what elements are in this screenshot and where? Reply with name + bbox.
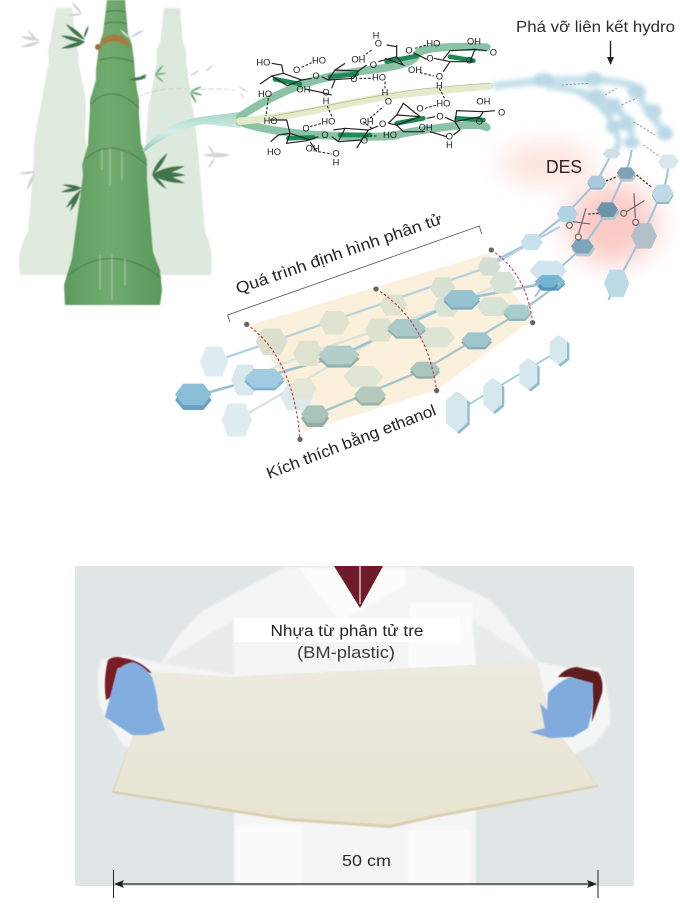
arrow: pointing to fibre bbox=[607, 41, 614, 65]
DES solvent glow bbox=[499, 144, 658, 264]
atom labels: HO bbox=[258, 89, 272, 99]
right glove bbox=[530, 677, 593, 738]
blurred blue fibre bbox=[493, 73, 674, 150]
atom labels: HO bbox=[436, 98, 450, 108]
label: BM-plastic: (BM-plastic) bbox=[297, 643, 395, 662]
left background bamboo bbox=[19, 8, 87, 275]
right cuff bbox=[558, 667, 602, 722]
atom labels: OH bbox=[306, 143, 320, 153]
atom labels: O bbox=[416, 103, 424, 113]
thick rings bbox=[175, 277, 558, 427]
photo: researcher holding BM-plastic sheet bbox=[75, 566, 634, 886]
strands bbox=[487, 150, 668, 300]
hydrogen bonds bbox=[266, 45, 445, 154]
atom labels: H bbox=[446, 140, 453, 150]
molecular structure: cellulose chains with hydrogen bonds bbox=[240, 30, 505, 167]
label box: plastic from bamboo molecules bbox=[234, 618, 460, 642]
lab coat bbox=[98, 567, 610, 884]
atom labels bbox=[256, 30, 505, 167]
atom labels: O bbox=[312, 71, 320, 81]
scissors bbox=[566, 193, 644, 240]
label: ethanol stimulation: Kích thích bằng ethanol bbox=[264, 400, 438, 483]
shaping zone band bbox=[250, 253, 532, 432]
atom labels: O bbox=[466, 56, 473, 66]
atom labels: O bbox=[293, 65, 300, 75]
atom labels: H bbox=[323, 96, 329, 106]
atom labels: OH bbox=[476, 97, 490, 107]
atom labels: O bbox=[321, 130, 329, 140]
molecular shaping: ordered hexagon strands bbox=[175, 226, 569, 442]
atom labels: O bbox=[405, 46, 413, 56]
right background bamboo bbox=[133, 8, 212, 275]
upper dashed bonds bbox=[562, 83, 660, 157]
atom labels: O bbox=[385, 97, 392, 107]
atom labels: HO bbox=[383, 130, 397, 140]
green and pale ribbons bbox=[240, 47, 490, 138]
red inner jacket bbox=[334, 566, 383, 608]
atom labels: O bbox=[498, 108, 505, 118]
atom labels: OH bbox=[360, 117, 374, 127]
left glove bbox=[105, 662, 165, 735]
atom labels: O bbox=[350, 74, 358, 84]
atom labels: O bbox=[332, 148, 340, 158]
atom labels: HO bbox=[321, 117, 335, 127]
atom labels: H bbox=[436, 80, 443, 90]
atom labels: O bbox=[426, 53, 434, 63]
atom labels: H bbox=[382, 88, 388, 98]
bamboo leaves bbox=[18, 0, 248, 212]
atom labels: HO bbox=[267, 147, 281, 157]
ethanol stimulation dashed arcs bbox=[247, 250, 533, 439]
atom labels: O bbox=[476, 117, 483, 127]
atom labels: HO bbox=[256, 58, 270, 68]
atom labels: O bbox=[490, 47, 497, 57]
plastic sheet bbox=[112, 662, 599, 828]
atom labels: H bbox=[333, 157, 339, 167]
atom labels: HO bbox=[312, 55, 326, 65]
atom labels: O bbox=[302, 123, 310, 133]
atom labels: O bbox=[361, 136, 368, 146]
dimension arrow: sheet width bbox=[114, 870, 598, 898]
atom labels: HO bbox=[264, 116, 278, 126]
pale rings bbox=[200, 235, 543, 437]
left cuff bbox=[105, 657, 152, 700]
hexagon rings bbox=[521, 149, 679, 297]
atom labels: OH bbox=[408, 65, 422, 75]
label: molecular shaping process: Quá trình định hình phân tử bbox=[234, 211, 445, 298]
label: DES: DES bbox=[546, 157, 582, 177]
illustration: bamboo stalks bbox=[18, 0, 248, 305]
atom labels: O bbox=[375, 38, 382, 48]
atom labels: O bbox=[379, 119, 386, 129]
bond lines bbox=[260, 45, 495, 152]
atom labels: H bbox=[373, 30, 379, 40]
atom labels: O bbox=[322, 88, 330, 98]
hydrogen bond breaking: unravelling chains bbox=[487, 73, 679, 300]
atom labels: O bbox=[436, 112, 444, 122]
label box: plastic from bamboo molecules: Nhựa từ phân tử tre bbox=[270, 623, 424, 640]
atom labels: HO bbox=[372, 73, 386, 83]
label: 50 cm: 50 cm bbox=[342, 853, 391, 870]
shaping bracket bbox=[228, 226, 482, 322]
unshaped strand on right bbox=[446, 335, 569, 434]
atom labels: O bbox=[370, 60, 377, 70]
cellulose fibre tube bbox=[142, 112, 240, 152]
atom labels: OH bbox=[351, 54, 365, 64]
connecting strands bbox=[193, 227, 560, 420]
label: breaking hydrogen bonds: Phá vỡ liên kết hydro bbox=[516, 19, 675, 36]
atom labels: HO bbox=[426, 38, 440, 48]
atom labels: OH bbox=[467, 37, 481, 47]
atom labels: O bbox=[436, 72, 443, 82]
atom labels: O bbox=[446, 132, 453, 142]
broken bonds bbox=[588, 175, 652, 214]
atom labels: OH bbox=[296, 84, 310, 94]
arc end points bbox=[244, 247, 535, 442]
atom labels: OH bbox=[419, 122, 433, 132]
central green bamboo bbox=[64, 0, 162, 305]
